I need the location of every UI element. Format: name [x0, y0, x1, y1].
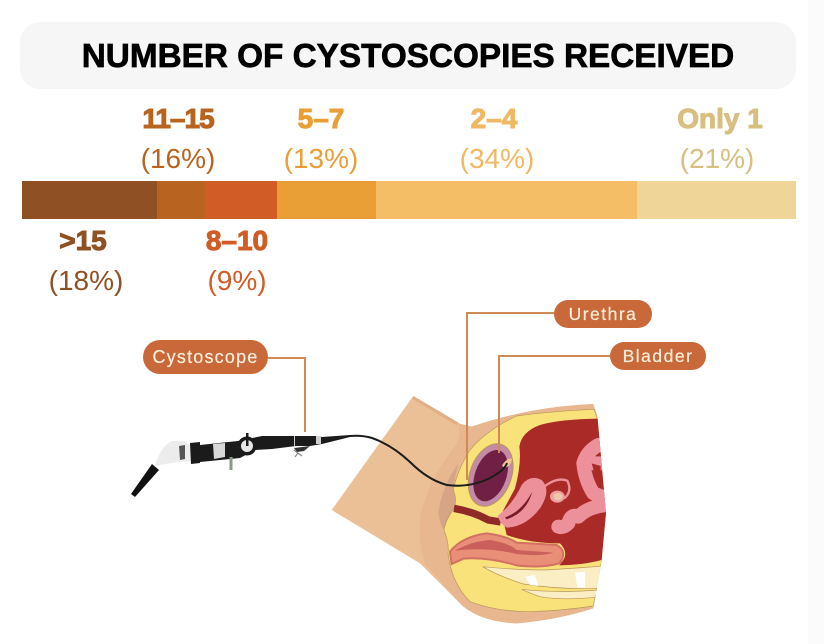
label: only 1 — [677, 103, 763, 174]
fallopian tube — [543, 480, 569, 499]
anatomy cross-section — [332, 396, 607, 623]
vagina — [450, 533, 563, 566]
label: 8-10: (9%) — [207, 265, 267, 296]
uterus — [498, 478, 546, 528]
label: 5-7 — [284, 103, 358, 174]
tag: urethra — [554, 300, 652, 328]
leader line: urethra — [467, 313, 554, 480]
right margin shading — [808, 0, 824, 644]
label: only 1: Only 1 — [677, 103, 763, 134]
label: >15 — [49, 225, 123, 296]
leader line: cystoscope — [268, 358, 305, 432]
label: 5-7: (13%) — [284, 143, 358, 174]
leader line: bladder — [499, 356, 610, 453]
label: >15: (18%) — [49, 265, 123, 296]
stacked bar — [22, 181, 796, 219]
label: 2-4 — [460, 103, 534, 174]
tag: cystoscope: Cystoscope — [152, 347, 259, 367]
label: 2-4: (34%) — [460, 143, 534, 174]
tag: bladder — [610, 342, 706, 370]
label: 11-15: 11–15 — [142, 103, 214, 134]
skin — [332, 396, 606, 623]
abdominal cavity — [502, 419, 606, 565]
label: 2-4: 2–4 — [471, 103, 517, 134]
urethra canal — [454, 508, 501, 522]
tag: urethra: Urethra — [569, 304, 637, 324]
tag: cystoscope — [143, 340, 268, 374]
label: only 1: (21%) — [680, 143, 754, 174]
title banner: NUMBER OF CYSTOSCOPIES RECEIVED — [82, 38, 734, 75]
label: 8-10: 8–10 — [206, 225, 268, 256]
title banner — [20, 22, 796, 89]
label: 11-15 — [141, 103, 215, 174]
label: 5-7: 5–7 — [298, 103, 344, 134]
bladder — [468, 443, 514, 507]
tag: bladder: Bladder — [623, 346, 693, 366]
label: >15: >15 — [59, 225, 107, 256]
rectum — [483, 566, 602, 589]
illustration — [131, 312, 610, 624]
label: 8-10 — [206, 225, 268, 296]
cystoscope — [131, 433, 507, 497]
label: 11-15: (16%) — [141, 143, 215, 174]
intestines — [558, 445, 607, 527]
fat layer — [444, 409, 606, 612]
ovary — [550, 491, 565, 503]
